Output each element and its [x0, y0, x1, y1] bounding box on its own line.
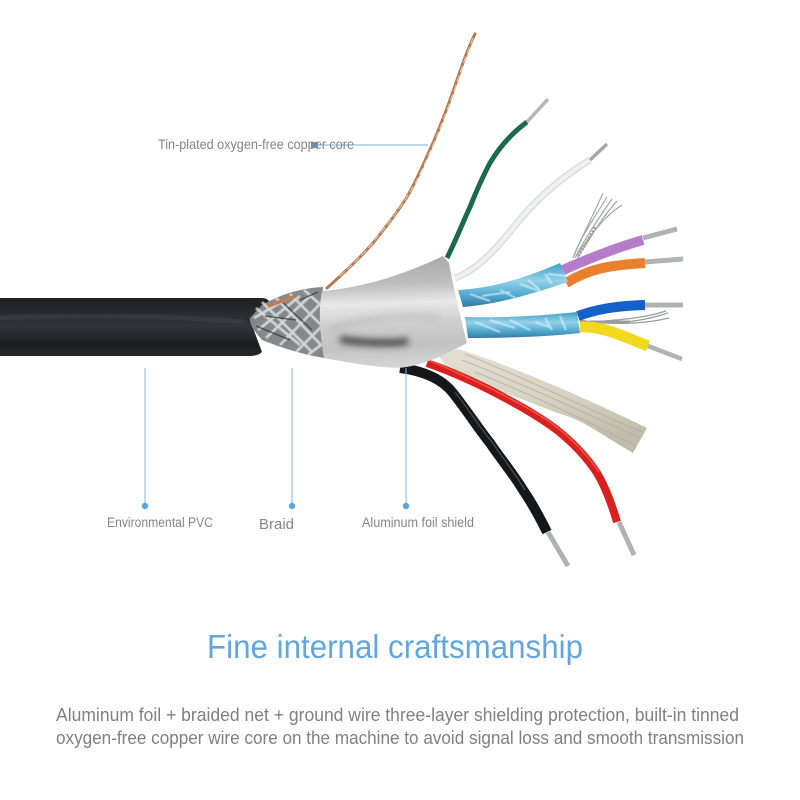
- copper ground wire: [327, 34, 475, 288]
- callout: copper core: Tin-plated oxygen-free copper core: [158, 137, 354, 152]
- title: Fine internal craftsmanship: [207, 628, 583, 665]
- orange wire: [566, 259, 683, 283]
- callout: aluminum foil shield: [362, 368, 474, 530]
- white wire: [455, 144, 607, 278]
- red wire: [427, 361, 634, 555]
- callout: braid: [259, 368, 295, 533]
- yellow wire: [580, 327, 682, 359]
- drain strand upper: [573, 193, 622, 258]
- callout: environmental PVC: Environmental PVC: [107, 515, 213, 530]
- upper blue shielded pair: [458, 263, 568, 307]
- blue wire: [578, 305, 683, 316]
- black wire: [400, 368, 568, 566]
- description: [56, 705, 744, 748]
- callout: environmental PVC: [107, 368, 213, 530]
- green wire: [447, 99, 548, 258]
- callout: braid: Braid: [259, 517, 294, 533]
- lower blue shielded pair: [465, 312, 580, 338]
- aluminum foil shield: [320, 256, 467, 368]
- outer PVC jacket: [0, 298, 270, 356]
- beige filler bundle: [438, 349, 647, 453]
- purple wire: [563, 229, 677, 270]
- callout: aluminum foil shield: Aluminum foil shield: [362, 515, 474, 530]
- drain strand lower: [580, 311, 669, 323]
- description: oxygen-free copper wire core on the machine to avoid signal loss and smooth transmission: [56, 728, 744, 748]
- tinned copper braid: [250, 287, 324, 358]
- description: Aluminum foil + braided net + ground wire three-layer shielding protection, built-in tinned: [56, 705, 739, 725]
